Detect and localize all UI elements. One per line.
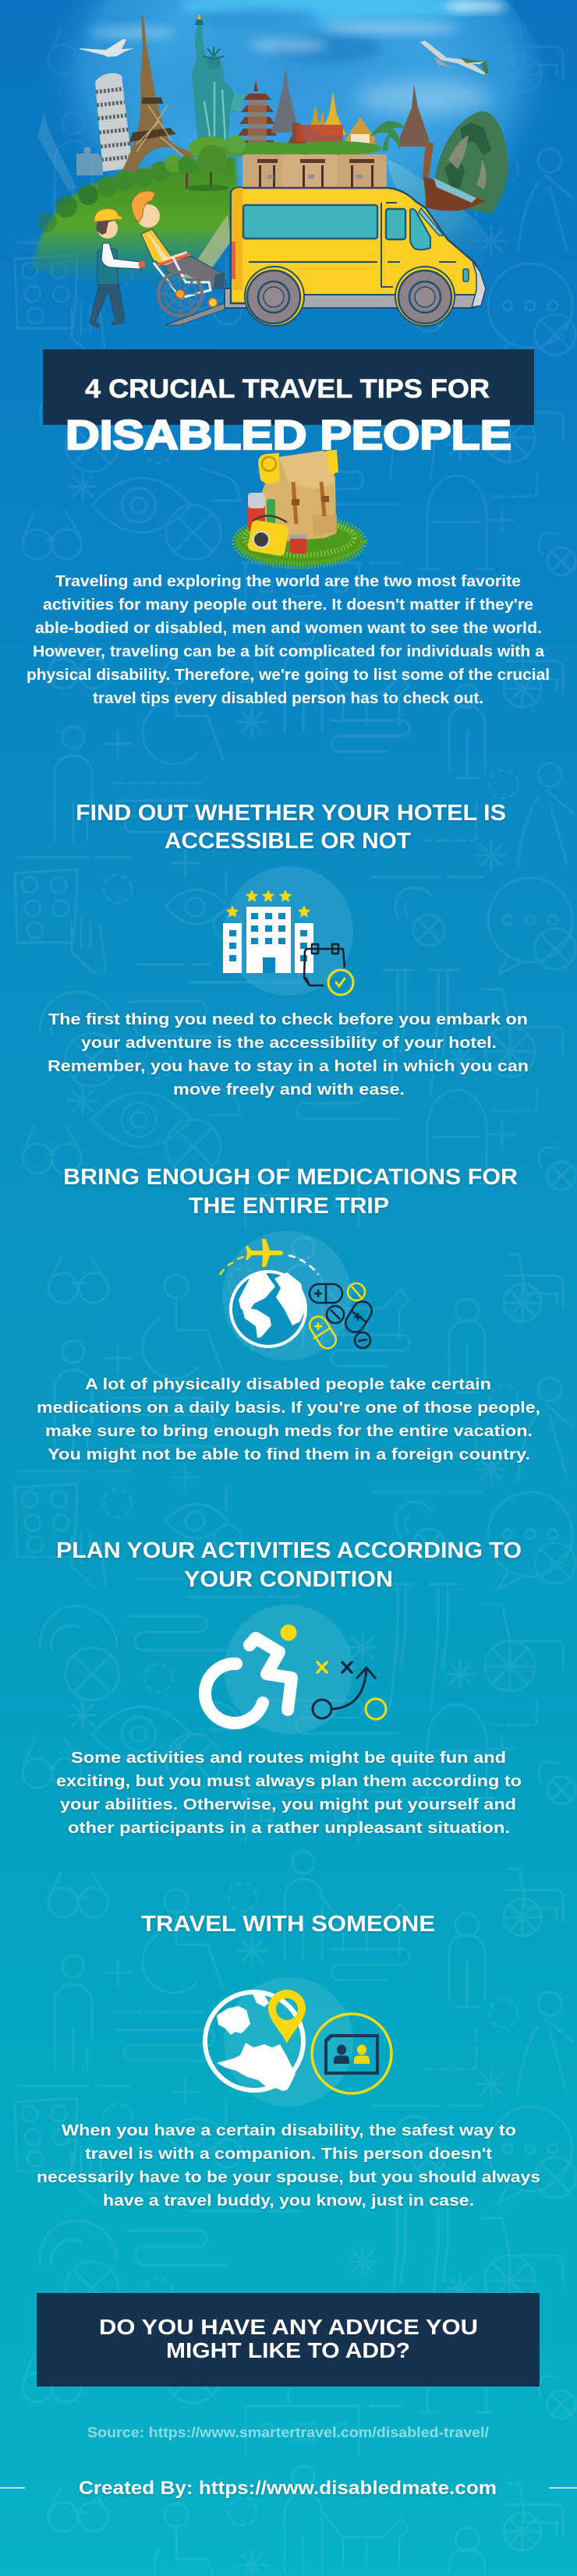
body text: The first thing you need to check before you embark on [48, 1010, 528, 1028]
luggage on van roof [242, 154, 387, 189]
bushes and trees [37, 135, 382, 232]
body text: your abilities. Otherwise, you might put yourself and [60, 1796, 516, 1813]
body text: move freely and with ease. [173, 1081, 405, 1099]
town buildings [76, 147, 103, 175]
body text: travel is with a companion. This person doesn't [85, 2145, 492, 2163]
intro paragraph: able-bodied or disabled, men and women want to see the world. [35, 619, 542, 637]
left airplane [80, 39, 134, 57]
body text [56, 1749, 522, 1837]
body text: Remember, you have to stay in a hotel in which you can [48, 1057, 529, 1075]
title banner [43, 349, 534, 425]
heading: FIND OUT WHETHER YOUR HOTEL IS [76, 801, 506, 826]
heading [76, 801, 506, 854]
heading: ACCESSIBLE OR NOT [165, 829, 411, 854]
title line two: DISABLED PEOPLE [65, 412, 512, 458]
statue of liberty [192, 14, 245, 143]
heading: TRAVEL WITH SOMEONE [141, 1912, 435, 1937]
body text: make sure to bring enough meds for the entire vacation. [45, 1422, 533, 1440]
body text: You might not be able to find them in a foreign country. [48, 1445, 530, 1463]
credit line: Created By: https://www.disabledmate.com [79, 2478, 497, 2499]
body text [37, 1375, 540, 1463]
intro paragraph: However, traveling can be a bit complicated for individuals with a [33, 642, 545, 660]
green hill [33, 156, 239, 286]
palm and spire [398, 84, 429, 147]
faded Big Ben [37, 113, 76, 191]
section 1: hotel accessibility [48, 801, 529, 1099]
road [179, 214, 231, 281]
golden stupa [320, 91, 346, 135]
source line: Source: https://www.smartertravel.com/disabled-travel/ [87, 2425, 489, 2440]
call to action banner: DO YOU HAVE ANY ADVICE YOU [99, 2315, 478, 2339]
icon: backpack on grass [235, 450, 363, 565]
intro paragraph: travel tips every disabled person has to check out. [93, 689, 483, 707]
section 3: plan activities [56, 1538, 522, 1837]
icon: globe, plane and pills [220, 1231, 375, 1361]
buddha statue [285, 123, 310, 154]
call to action banner [37, 2293, 540, 2387]
heading [63, 1165, 518, 1219]
body text: Some activities and routes might be quite fun and [71, 1749, 506, 1767]
body text [37, 2121, 540, 2210]
pisa tower [95, 73, 133, 172]
body text: necessarily have to be your spouse, but you should always [37, 2168, 540, 2186]
intro paragraph: physical disability. Therefore, we're going to list some of the crucial [27, 666, 550, 684]
heading: PLAN YOUR ACTIVITIES ACCORDING TO [56, 1538, 522, 1563]
person in wheelchair [132, 191, 226, 316]
heading: BRING ENOUGH OF MEDICATIONS FOR [63, 1165, 518, 1190]
boat [423, 140, 486, 211]
title line one: 4 CRUCIAL TRAVEL TIPS FOR [85, 374, 490, 404]
water [388, 160, 497, 271]
body text [48, 1010, 529, 1099]
icon: globe, map pin and companions card [205, 1977, 391, 2107]
sky globe [29, 0, 551, 292]
intro paragraph [27, 572, 550, 707]
icon: hotel with calendar [223, 866, 353, 996]
body text: A lot of physically disabled people take certain [85, 1375, 491, 1393]
body text: When you have a certain disability, the safest way to [62, 2121, 516, 2139]
body text: have a travel buddy, you know, just in case. [103, 2192, 474, 2210]
limestone rock [434, 111, 508, 214]
yellow van [225, 188, 486, 326]
intro paragraph: activities for many people out there. It doesn't matter if they're [43, 596, 533, 614]
body text: your adventure is the accessibility of your hotel. [81, 1034, 497, 1052]
pagoda [238, 80, 277, 147]
section 2: medications [37, 1165, 540, 1463]
body text: medications on a daily basis. If you're one of those people, [37, 1399, 540, 1417]
icon: wheelchair symbol and game plan [205, 1605, 386, 1734]
thai temple [346, 117, 375, 145]
helper pushing wheelchair [90, 209, 145, 328]
call to action banner: MIGHT LIKE TO ADD? [166, 2338, 410, 2362]
hero illustration: globe with landmarks and accessible van [29, 0, 551, 328]
eiffel tower [122, 16, 200, 172]
body text: other participants in a rather unpleasant situation. [68, 1819, 510, 1837]
ramp [165, 303, 225, 325]
intro paragraph: Traveling and exploring the world are the two most favorite [55, 572, 521, 590]
body text: exciting, but you must always plan them according to [56, 1772, 522, 1790]
heading [56, 1538, 522, 1592]
section 4: travel with someone [37, 1912, 540, 2210]
right airplane [420, 41, 489, 75]
heading: THE ENTIRE TRIP [189, 1194, 389, 1219]
heading: YOUR CONDITION [184, 1567, 393, 1592]
wat spire [271, 66, 299, 133]
